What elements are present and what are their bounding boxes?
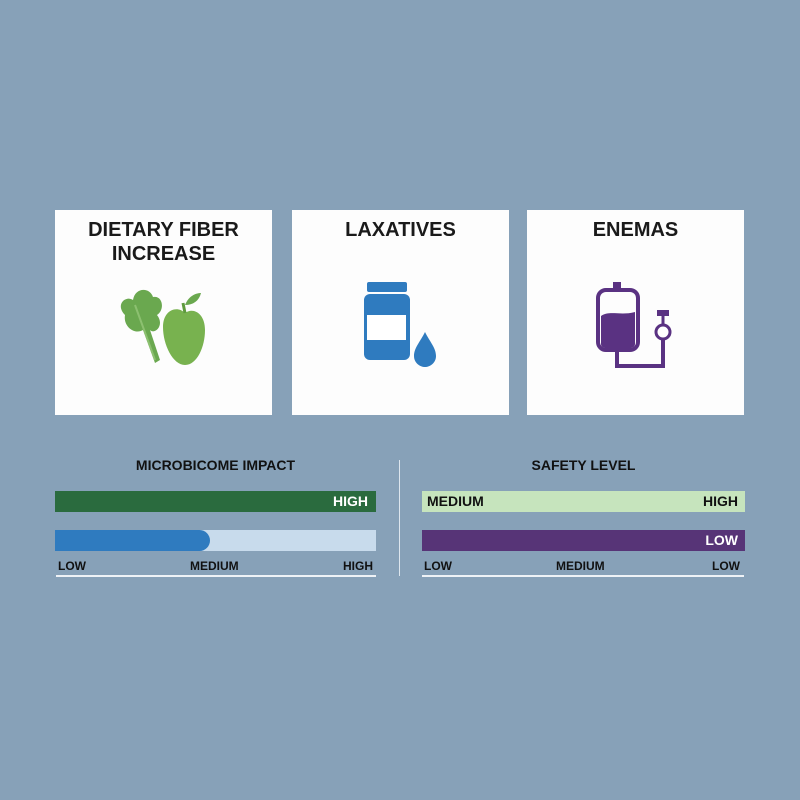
- bar: fiber safety: HIGH: [703, 493, 738, 509]
- card: laxatives: [292, 210, 509, 415]
- card: dietary fiber: [55, 210, 272, 415]
- card title: LAXATIVES: [345, 219, 456, 241]
- card title: DIETARY FIBER: [88, 219, 239, 241]
- heading: microbiome impact: MICROBICOME IMPACT: [136, 457, 295, 473]
- bar: fiber safety: MEDIUM: [427, 493, 484, 509]
- card title: ENEMAS: [593, 219, 678, 241]
- bar: laxative medium: [55, 530, 376, 551]
- bar: enema safety low: LOW: [705, 532, 738, 548]
- bar: fiber high: HIGH: [333, 493, 368, 509]
- icon: enema bag: [596, 282, 672, 368]
- axis labels right: [424, 559, 740, 573]
- bar: enema safety low: [422, 530, 745, 551]
- bar: fiber safety: [422, 491, 745, 512]
- bar: fiber high: [55, 491, 376, 512]
- axis labels left: [58, 559, 373, 573]
- card title: INCREASE: [112, 243, 215, 265]
- card: enemas: [527, 210, 744, 415]
- axis labels left: LOW: [58, 559, 86, 573]
- axis labels right: LOW: [712, 559, 740, 573]
- icon: lettuce and apple: [120, 290, 205, 365]
- icon: bottle and drop: [364, 282, 436, 367]
- axis labels right: LOW: [424, 559, 452, 573]
- axis labels left: MEDIUM: [190, 559, 239, 573]
- card title: [88, 219, 239, 265]
- axis labels right: MEDIUM: [556, 559, 605, 573]
- axis labels left: HIGH: [343, 559, 373, 573]
- heading: safety level: SAFETY LEVEL: [532, 457, 635, 473]
